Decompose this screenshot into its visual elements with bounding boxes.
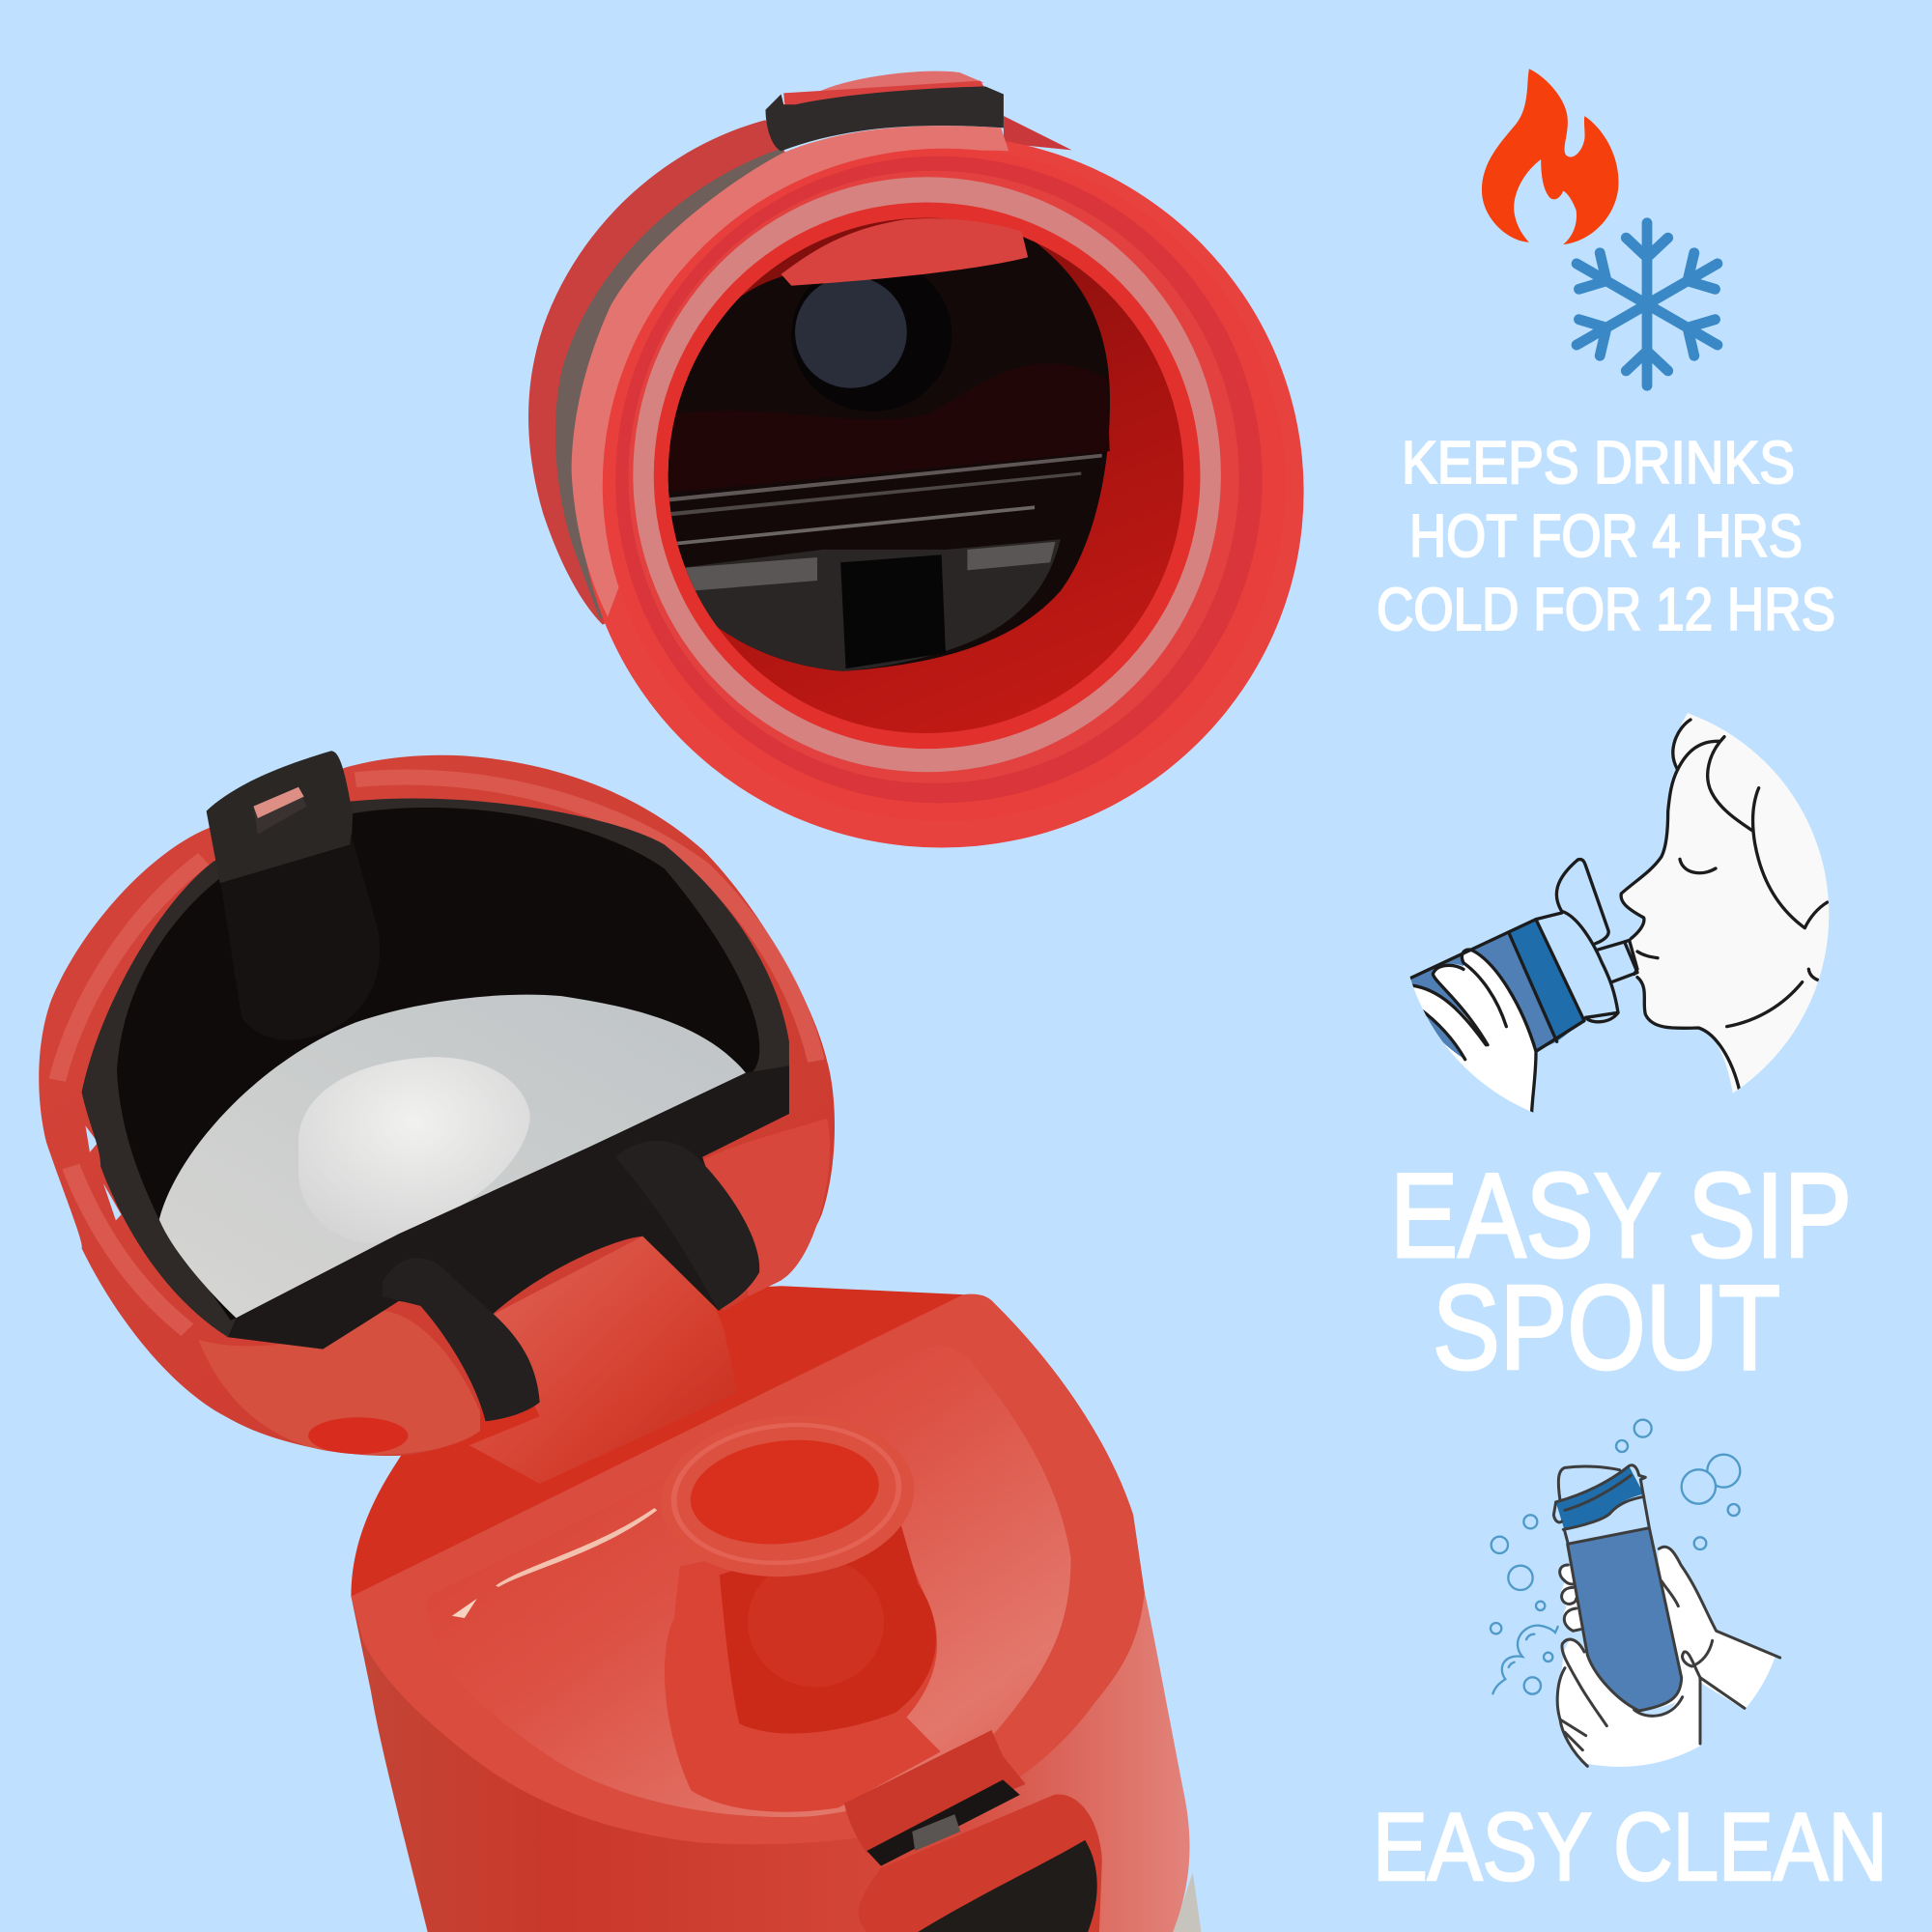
hinge block <box>469 1236 738 1484</box>
latch red insert <box>783 81 984 104</box>
bottle grey ring <box>1173 1872 1202 1932</box>
white silicone plug <box>298 1057 530 1243</box>
bubbles <box>1491 1420 1740 1694</box>
push button <box>859 1795 1102 1932</box>
text: easy sip spout <box>1390 1150 1852 1395</box>
lower lip <box>198 1311 480 1455</box>
bottle bottom light <box>1639 1702 1676 1716</box>
finger fills <box>1560 1565 1584 1631</box>
bottle dark band <box>1509 920 1584 1041</box>
photo: lid collar seen from below <box>528 71 1304 847</box>
hands white fill <box>1559 1548 1776 1767</box>
spout rim gloss <box>657 1409 916 1578</box>
latch tongue <box>844 1730 1026 1853</box>
bottle lower blue <box>1568 1528 1682 1711</box>
bottle and hand outlines <box>1553 1465 1780 1766</box>
lid black interior <box>117 808 759 1321</box>
left rim highlight <box>71 1167 187 1330</box>
text: insulation claim: COLD FOR 12 HRS <box>1377 577 1835 643</box>
bottle mid band <box>1471 932 1557 1051</box>
right lip <box>699 1119 830 1296</box>
latch slot <box>867 1779 1020 1866</box>
collar pink band <box>572 126 1009 617</box>
hinge strap left <box>383 1258 540 1421</box>
lid dark liner <box>82 797 789 1337</box>
side slit gaps <box>85 1125 122 1220</box>
inner red rim <box>654 202 1200 749</box>
push button black insert <box>918 1840 1097 1932</box>
hand fill <box>1412 952 1534 1113</box>
lid hole <box>308 1417 408 1454</box>
grey band <box>555 149 822 619</box>
spout tube <box>720 1515 936 1734</box>
bottle body <box>351 1592 1190 1932</box>
bottle cap blue band <box>1556 1466 1644 1529</box>
black latch <box>765 86 1004 151</box>
photo: open flip lid <box>39 751 835 1484</box>
inner cavity <box>668 218 1183 733</box>
thread ring light <box>629 171 1239 783</box>
text: insulation claim: HOT FOR 4 HRS <box>1409 503 1803 570</box>
collar front body <box>580 135 1304 847</box>
gloss streaks <box>496 1508 657 1587</box>
icon: hands washing bottle with bubbles <box>1490 1418 1781 1768</box>
icon: snowflake <box>1566 223 1728 385</box>
lid strap shadow <box>220 830 380 1040</box>
flip plate <box>351 1294 1145 1844</box>
text: insulation claim: KEEPS DRINKS <box>1402 430 1795 497</box>
spout rim <box>641 1398 934 1594</box>
bright lip <box>603 149 1286 821</box>
hinge strap right <box>615 1141 759 1311</box>
latch pin <box>912 1814 960 1851</box>
thread ring right <box>615 156 1263 803</box>
strap window light <box>253 787 304 818</box>
vent ball <box>795 276 907 388</box>
inner red tab <box>781 218 1028 286</box>
lower band sliver <box>1424 1012 1463 1058</box>
bottle far band <box>1410 956 1469 1020</box>
face fill <box>1623 713 1830 1094</box>
plate recess <box>427 1346 1071 1817</box>
text: easy sip spout: SPOUT <box>1433 1262 1780 1395</box>
spout tube highlight <box>748 1557 884 1687</box>
back dome <box>351 1286 963 1597</box>
cavity black interior <box>662 234 1110 671</box>
dark circular vent <box>791 258 952 412</box>
collar back wall <box>528 120 822 625</box>
icon: flame <box>1482 69 1619 244</box>
text: easy sip spout: EASY SIP <box>1390 1150 1852 1283</box>
photo: bottle cap with spout <box>351 1286 1202 1932</box>
front wall and hinge dark <box>228 1065 789 1350</box>
red strip by latch right <box>1004 116 1072 150</box>
icon: person sipping from bottle <box>1410 713 1830 1113</box>
lid strap tab <box>207 751 353 883</box>
text: insulation claim <box>1377 430 1835 643</box>
clear seal ring <box>633 177 1221 772</box>
strap window <box>253 787 306 834</box>
spout base shadow <box>665 1523 941 1812</box>
line art <box>1408 720 1828 1118</box>
rim highlights <box>57 778 816 1080</box>
spout opening <box>677 1428 892 1557</box>
top pink tab <box>786 71 984 104</box>
lid shell <box>39 755 835 1456</box>
grey seal disc <box>159 995 746 1318</box>
